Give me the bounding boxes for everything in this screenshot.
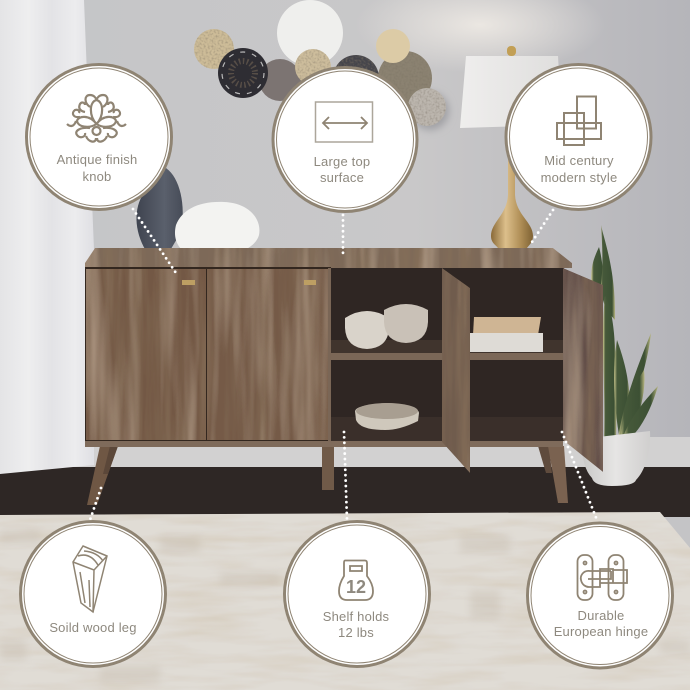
label: Shelf holds [323,609,390,624]
dotted leader: shelf [344,432,347,520]
label: Soild wood leg [49,620,137,635]
dotted leader: top surface [342,215,344,253]
dark floor [0,467,690,517]
stacked books [470,317,543,352]
wall background [0,0,690,446]
plates [355,403,419,430]
dotted leader: knob [133,209,178,276]
icon: ornate knob [67,95,126,142]
callout: solid wood leg [20,522,166,666]
callout: durable european hinge [528,523,672,668]
icon: kettlebell [339,560,373,600]
plant pot [581,431,650,486]
callout: large top surface [273,68,417,212]
icon: hinge [578,555,627,600]
white bowl [175,202,259,258]
table lamp [460,46,562,257]
rug [0,512,690,690]
snake plant [591,225,658,440]
callout: large top surface: surface [320,170,364,185]
door second [207,269,328,440]
icon: overlapping rectangles [557,96,601,145]
sideboard [85,248,603,505]
icon: surface with arrow [316,102,372,142]
dotted leader: hinge [562,432,597,520]
callout: shelf holds 12 lbs: 12 lbs [338,625,374,640]
callout: antique finish knob: knob [82,169,112,184]
dotted leader: leg [90,488,101,520]
curtain [0,0,94,474]
dotted leader: style [530,210,553,245]
callout: mid century modern style: modern style [541,170,617,185]
label: Durable [578,608,624,623]
callout: durable european hinge: European hinge [554,624,648,639]
label: Mid century [544,153,614,168]
label: Antique finish [57,152,137,167]
callout: mid century modern style [506,64,651,210]
bowls [345,304,428,349]
open door two [563,268,603,472]
knobs [182,280,316,285]
open door one [442,268,470,473]
callout: shelf holds 12 lbs: 12 [346,577,366,597]
door left [86,269,206,440]
label: Large top [314,154,370,169]
icon: wood block [73,546,107,612]
callout: shelf holds 12 lbs [284,522,430,666]
baseboard [0,437,690,468]
wall decor discs [194,0,449,130]
vase [136,168,183,254]
callout: antique finish knob [26,64,172,210]
